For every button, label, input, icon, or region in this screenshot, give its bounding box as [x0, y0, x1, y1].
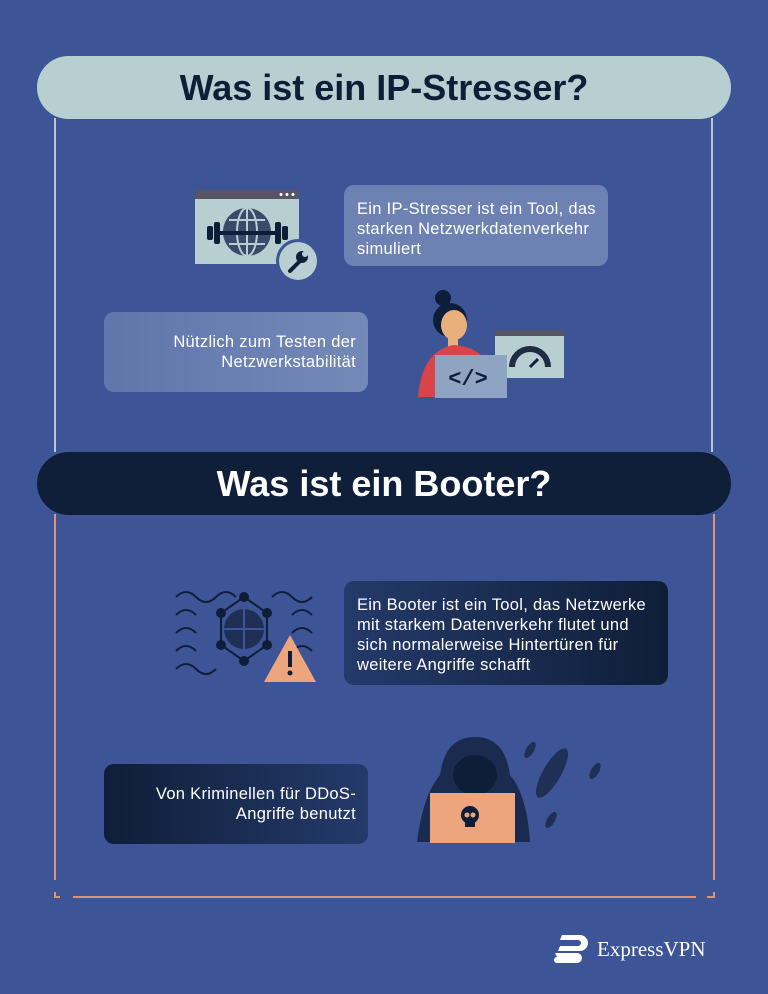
title: Booter: Was ist ein Booter?	[217, 463, 551, 504]
text box: booter definition: mit starkem Datenverkehr flutet und	[357, 616, 629, 634]
text box: useful for testing: Netzwerkstabilität	[221, 353, 356, 371]
text box: stresser definition: starken Netzwerkdatenverkehr	[357, 220, 589, 238]
text box: booter definition	[344, 581, 668, 685]
title: IP-Stresser	[37, 56, 731, 119]
icon: woman with laptop and speedometer	[418, 290, 564, 398]
text box: useful for testing: Nützlich zum Testen der	[173, 333, 356, 351]
text box: stresser definition: simuliert	[357, 240, 421, 258]
text box: booter definition: Ein Booter ist ein Tool, das Netzwerke	[357, 596, 646, 614]
text box: booter definition: sich normalerweise Hintertüren für	[357, 636, 618, 654]
text box: useful for testing	[104, 312, 368, 392]
text box: used by criminals: Angriffe benutzt	[236, 805, 356, 823]
text box: used by criminals	[104, 764, 368, 844]
icon: browser with globe and dumbbell and wrench	[195, 190, 317, 280]
text box: stresser definition: Ein IP-Stresser ist ein Tool, das	[357, 200, 596, 218]
text box: used by criminals: Von Kriminellen für DDoS-	[156, 785, 356, 803]
logo: ExpressVPN	[554, 935, 706, 963]
text box: booter definition: weitere Angriffe schafft	[357, 656, 531, 674]
icon: woman with laptop and speedometer: </>	[448, 367, 488, 392]
title: Booter	[37, 452, 731, 515]
frame lines: top section	[54, 118, 56, 452]
icon: hooded hacker with bombs	[417, 737, 601, 843]
logo: ExpressVPN: ExpressVPN	[597, 937, 706, 961]
title: IP-Stresser: Was ist ein IP-Stresser?	[180, 67, 588, 108]
frame lines: bottom section	[54, 514, 56, 880]
text box: stresser definition	[344, 185, 608, 266]
icon: network globe with waves and warning	[175, 591, 316, 682]
